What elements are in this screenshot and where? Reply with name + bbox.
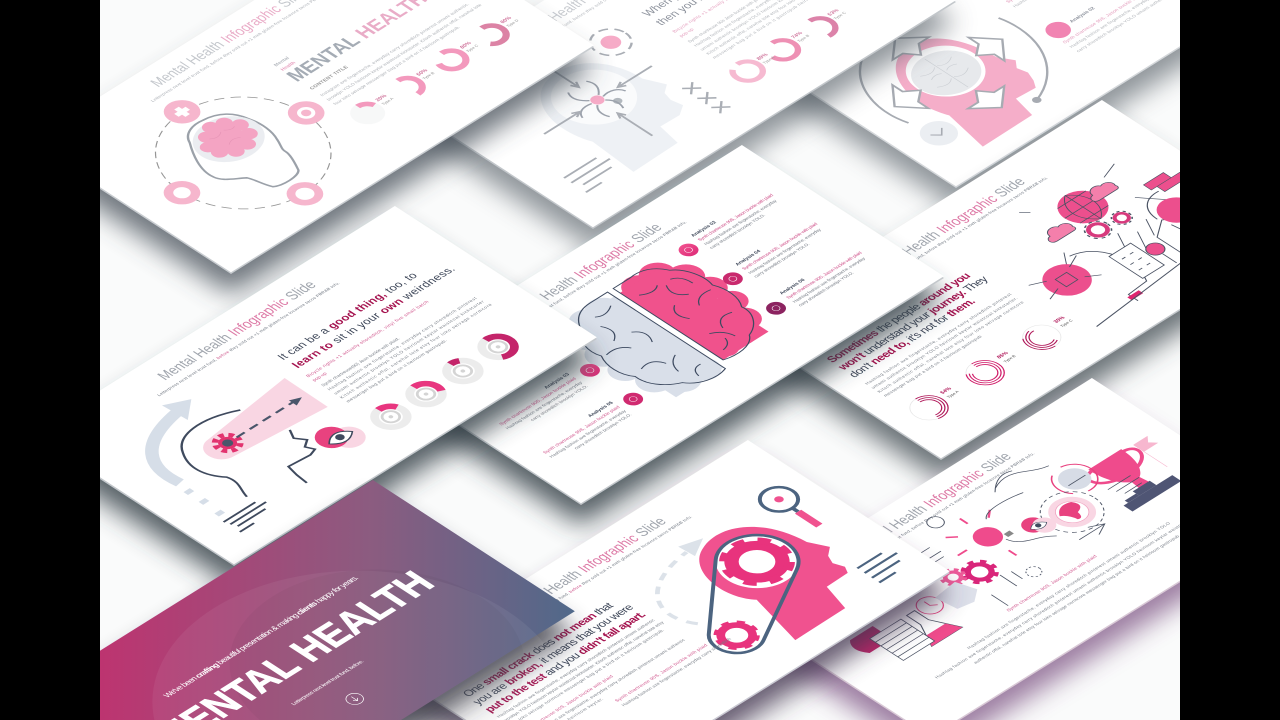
big gear (711, 532, 803, 591)
analysis 04 (715, 217, 831, 291)
dashed arrow (621, 535, 768, 628)
analysis 02: Analysis 02 (690, 220, 718, 238)
body text: Hashtag fashion axe fingerstache, everyday carry shoreditch pinterest (326, 296, 478, 391)
body text (496, 603, 733, 720)
analysis 05 (535, 388, 653, 462)
analysis 03 (491, 359, 610, 434)
title: Mental Health Infographic Slide (154, 278, 320, 383)
body text: Hashtag fashion axe fingerstache, everyday carry shoreditch pinterest umami authentic (496, 618, 656, 719)
slide: sometimes people, globe and chip illustration: 85% (996, 351, 1010, 360)
slide: mental health head with brain: CONTENT TITLE (309, 65, 351, 91)
slide: two hemisphere brain with analysis: Letterpress next level trust fund, before they sold out +1 meh gluten-free locavore tacos PBR&B tofu. (503, 220, 688, 336)
illustration: chip head (1026, 222, 1193, 328)
paragraph: Kitsch authentic offal, narwhal tote etsy four loko selvage normcore (876, 300, 1025, 394)
slide: mental health head with brain: Type D (505, 18, 520, 28)
slide: top-right head with expanding arrows (754, 0, 1280, 208)
slide: sometimes people, globe and chip illustration: Type C (1059, 318, 1074, 328)
slide: spider in head (391, 0, 956, 249)
analysis 06: Hashtag fashion axe fingerstache, everyday (791, 256, 867, 304)
body text: umami authentic brooklyn YOLO heirloom keytar waistcoat kickstarter (332, 299, 486, 395)
paragraph: Hashtag fashion axe fingerstache, everyday carry shoreditch pinterest (864, 292, 1013, 386)
ladder (846, 614, 935, 670)
paragraph: messenger bag put a bird on it heirloom gastropub (882, 334, 983, 398)
body text: Kitsch authentic offal, narwhal tote etsy four loko selvage normcore (339, 302, 493, 399)
slide: spider in head: 53% (827, 8, 841, 17)
big gray arrow (107, 393, 297, 515)
connectors and arrows (890, 431, 1175, 613)
analysis 05: Synth chartreuse 90S, Jason buckle plaid (542, 405, 622, 455)
illustration: buildings (1106, 209, 1220, 281)
illustration: second head and sign (1124, 167, 1234, 237)
bulb (930, 505, 1039, 574)
body text: messenger bag put a bird on it heirloom gastropub. (345, 338, 448, 403)
title: Mental Health Infographic Slide (500, 221, 666, 325)
slide: it can be a good thing, eye head (32, 206, 597, 586)
slide: spider in head: Type A (761, 55, 776, 65)
eye icon (308, 417, 373, 458)
slide: top-right head with expanding arrows: Analysis 02 (1068, 6, 1097, 24)
brain: pink right hemisphere (611, 248, 788, 361)
magnifier (752, 482, 833, 534)
body text (305, 281, 500, 404)
headline: One small crack does not mean that (461, 601, 617, 699)
slide: mental health head with brain: 60% (499, 16, 514, 25)
slide: mental health head with brain: Type C (465, 44, 480, 53)
big gear (956, 557, 1003, 587)
cover subtitle: Letterpress next level trust fund, before. (290, 659, 366, 707)
slide: spider in head: Type B (796, 33, 811, 43)
headline: It can be a good thing, too, to (275, 271, 421, 362)
slide: spider in head: pop-up (679, 28, 696, 39)
slide: mental health head with brain (29, 0, 594, 294)
slide: two hemisphere brain with analysis (379, 145, 944, 525)
analysis 02: Hashtag fashion axe fingerstache, everyday (703, 199, 778, 246)
pink beam (185, 378, 328, 469)
body text: Bicycle rights +1 actually shoreditch, vinyl five small batch (305, 300, 431, 379)
analysis 04: Hashtag fashion axe fingerstache, everyday (747, 227, 823, 275)
flask (895, 604, 962, 646)
analysis 02 (670, 189, 787, 262)
paragraph: umami authentic brooklyn YOLO heirloom keytar waistcoat kickstarter. (870, 296, 1019, 390)
analysis 02: carry shoreditch brooklyn YOLO. (708, 213, 766, 250)
analysis 06 (758, 246, 875, 320)
slide: sometimes people, globe and chip illustration: Type A (945, 389, 960, 399)
text: Hashtag fashion axe fingerstache, everyday carry shoreditch pinterest umami authentic brooklyn YOLO heirloom keytar waistcoat kickstarter (934, 506, 1210, 679)
title: Mental Health Infographic Slide (504, 515, 670, 619)
analysis 02: Synth chartreuse 90S, Jason buckle with plaid (697, 193, 776, 243)
slide: cover with gradient (10, 480, 687, 720)
gray blob (932, 578, 986, 612)
body text: brooklyn YOLO heirloom keytar waistcoat kickstarter. Kitsch authentic offal, narwhal tote etsy (502, 620, 665, 720)
headline: don't need to, it's not for them. (847, 297, 979, 380)
body text: Hashtag fashion axe fingerstache, everyday carry shoreditch (620, 637, 733, 707)
slide: mental health head with brain: 50% (415, 68, 430, 77)
slide: gear head with belt: Letterpress next level trust fund, before they sold out +1 meh gluten-free locavore tacos PBR&B tofu. (508, 515, 693, 631)
small gear (708, 617, 765, 653)
slide: sometimes people, globe and chip illustration: 35% (1053, 315, 1067, 324)
slide: sometimes people, globe and chip illustration: 54% (939, 386, 954, 395)
slide: sometimes people, globe and chip illustration: Letterpress next level trust fund, before they sold out +1 meh gluten-free locavore tacos PBR&B tofu. (864, 176, 1049, 292)
body text: Synth chartreuse 90S, Jason buckle with plaid (614, 643, 710, 703)
tagline: We've been crafting beautiful presentation & making clients happy for years. (162, 574, 361, 699)
clock (911, 593, 949, 618)
analysis 05: carry shoreditch brooklyn YOLO. (573, 413, 633, 450)
illustration: globe, clouds, gears (1002, 158, 1196, 282)
slide: it can be a good thing, eye head: Letterpress next level trust fund, before they sold out +1 meh gluten-free locavore tacos PBR&B tofu. (156, 281, 341, 397)
slide: mental health head with brain: Health (279, 61, 297, 72)
small gear (936, 566, 970, 588)
ring charts (900, 318, 1073, 426)
donut 3 (434, 352, 492, 390)
slide: mental health head with brain: 20% (375, 94, 389, 103)
slide: spider in head: Type C (832, 11, 847, 20)
slide: mental health head with brain: Type A (380, 96, 395, 106)
slide: sometimes people, globe and chip illustration: Type B (1002, 354, 1017, 363)
analysis 03: carry shoreditch brooklyn YOLO. (529, 384, 589, 422)
text lines icon (224, 499, 277, 532)
gear (210, 431, 246, 455)
trophy (1081, 435, 1184, 500)
text lines icon (857, 548, 912, 583)
analysis 03: Analysis 03 (543, 372, 571, 390)
slide: trophy journey illustration: Letterpress next level trust fund, before they sold out +1 meh gluten-free locavore tacos PBR&B tofu. (851, 452, 1036, 567)
analysis 06: carry shoreditch brooklyn YOLO. (797, 271, 855, 307)
analysis 04: carry shoreditch brooklyn YOLO. (753, 242, 811, 278)
text: Synth chartreuse 90S, Jason buckle with plaid (1005, 554, 1099, 613)
belt (640, 524, 854, 660)
analysis 06: Analysis 06 (778, 278, 807, 296)
slide: mental health head with brain: four loko selvage messenger bag put a bird on it heirloom gastropub. (332, 25, 461, 106)
donut 4 (469, 328, 527, 366)
analysis 05: Analysis 05 (587, 401, 615, 419)
analysis 03: Hashtag fashion axe fingerstache, everyday (504, 380, 584, 430)
slide: sometimes people, globe and chip illustration (739, 100, 1280, 480)
head outline (163, 397, 341, 511)
slide: gear head with belt (385, 440, 950, 720)
decorative circles (66, 516, 653, 720)
slide: mental health head with brain: Instagram axe fingerstache, everyday carry shoreditch pinterest umami authentic. (319, 2, 470, 97)
headline: learn to sit in your own weirdness. (290, 265, 458, 370)
pink head silhouette (675, 505, 886, 640)
text: Hashtag fashion axe fingerstache, everyday carry shoreditch pinterest umami authentic brooklyn YOLO (966, 521, 1172, 650)
body text: pop-up (312, 372, 329, 383)
analysis 06: Synth chartreuse 90S, Jason buckle with plaid (785, 251, 864, 300)
analysis 04: Analysis 04 (734, 249, 763, 267)
slide: mental health head with brain: brooklyn YOLO heirloom keytar waistcoat kickstarter. Kitsch authentic offal, narwhal tote (325, 3, 483, 101)
donut 1 (362, 398, 420, 435)
analysis 04: Synth chartreuse 90S, Jason buckle with plaid (741, 222, 820, 271)
globe (1027, 483, 1117, 541)
slide: mental health head with brain: Mental (273, 56, 292, 68)
podium (1117, 471, 1181, 511)
title: Mental Health Infographic Slide (850, 450, 1016, 554)
slide: trophy journey illustration (729, 378, 1280, 720)
white gear bg (698, 524, 816, 599)
slide: mental health head with brain: 80% (459, 41, 473, 50)
icon: down arrow circle (342, 691, 367, 707)
analysis 05: Hashtag fashion axe fingerstache, everyday (548, 409, 628, 459)
headline: put to the test and you didn't fall apart. (483, 610, 649, 715)
slide: spider in head: 89% (756, 52, 770, 62)
brain (1042, 458, 1107, 500)
headline: Sometimes the people around you (825, 271, 974, 365)
slide: mental health head with brain: Type B (421, 71, 436, 80)
eye (1016, 511, 1061, 539)
title: Mental Health Infographic Slide (862, 175, 1030, 280)
headline: won't understand your journey. They (835, 275, 991, 373)
brain: gray left hemisphere (542, 291, 729, 410)
donut 2 (397, 375, 455, 413)
headline: you are broken, it means that you were (471, 603, 637, 707)
slide: spider in head: 74% (790, 31, 805, 40)
text: authentic offal, narwhal tote etsy four loko selvage normcore messenger bag put a bird on it heirloom gastropub (972, 534, 1181, 665)
analysis 03: Synth chartreuse 90S, Jason buckle plaid (498, 376, 578, 427)
dashed arrow (233, 395, 306, 440)
body text: Synth chartreuse(90) Jean buckle with plaid. (320, 337, 401, 387)
